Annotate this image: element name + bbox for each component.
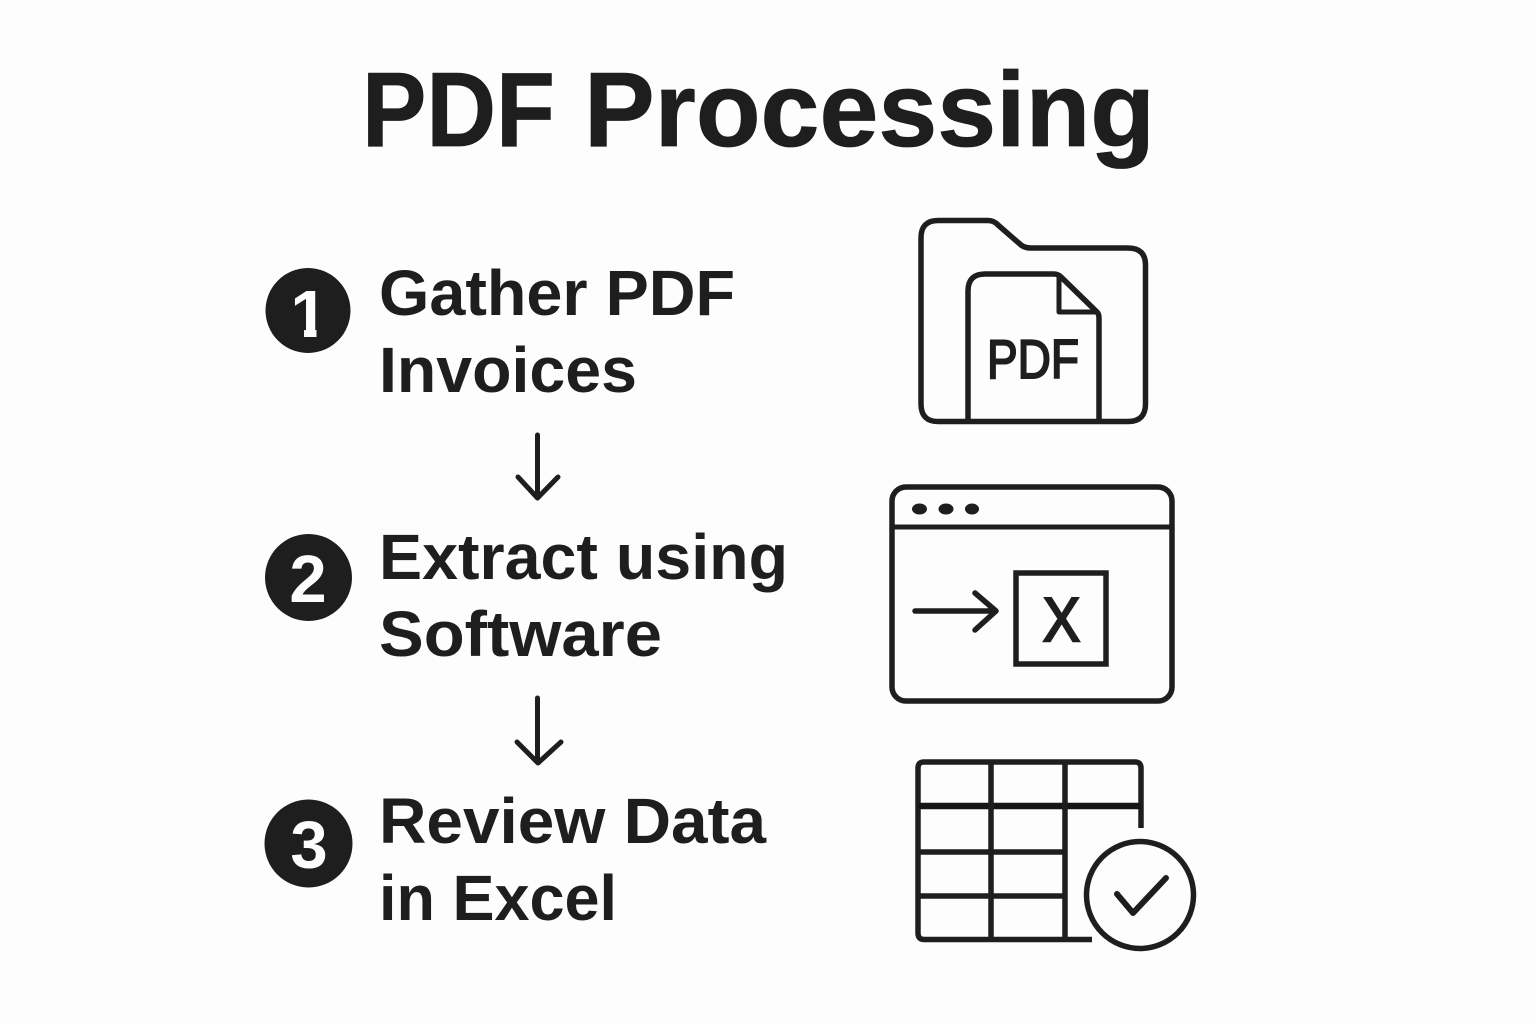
step 1 label: Gather PDF (379, 257, 735, 329)
title: Processing (584, 51, 1155, 169)
step 2 label (379, 521, 788, 670)
title: PDF (362, 51, 555, 169)
step 3 label (379, 785, 766, 934)
step 3 label: in Excel (379, 862, 617, 934)
step 2 label: Extract using (379, 521, 788, 593)
step 1 badge (266, 268, 350, 353)
step 3 badge (264, 800, 352, 888)
step 3 label: Review Data (379, 785, 766, 857)
step 2 badge: 2 (289, 542, 327, 617)
step 1 label: Invoices (379, 334, 637, 406)
icon: spreadsheet with check mark (918, 762, 1194, 948)
icon: software window with Excel export (892, 487, 1172, 701)
step 1 label (379, 257, 735, 406)
step 1 badge: 1 (290, 277, 328, 352)
icon: software window with Excel export: X (1043, 586, 1080, 655)
icon: folder with PDF: PDF (987, 328, 1079, 390)
arrow 1 to 2 (518, 435, 558, 498)
step 2 badge (265, 534, 352, 621)
icon: folder with PDF (921, 220, 1146, 422)
step 3 badge: 3 (290, 808, 328, 883)
step 2 label: Software (379, 598, 662, 670)
arrow 2 to 3 (517, 698, 561, 763)
